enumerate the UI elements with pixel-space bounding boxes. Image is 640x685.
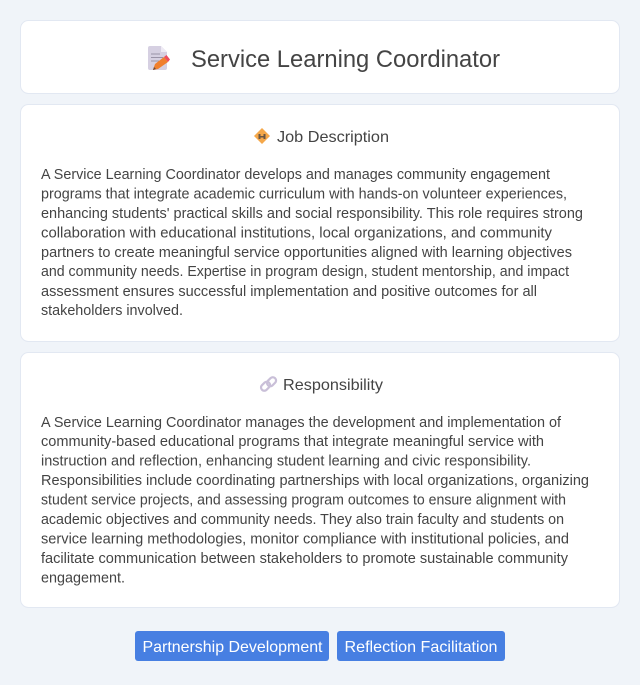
panel: responsibility — [20, 352, 620, 608]
panel: job description — [20, 104, 620, 342]
tag: reflection facilitation — [337, 631, 505, 661]
panel: title header — [20, 20, 620, 94]
text block: responsibility: A Service Learning Coordinator manages the development and implementation of — [41, 415, 562, 431]
text block: responsibility — [41, 415, 589, 586]
tag: partnership development — [135, 631, 329, 661]
text block: job description: enhancing students' practical skills and social responsibility. This role requires strong — [41, 206, 583, 222]
text block: responsibility: engagement. — [41, 570, 125, 586]
title: Service Learning Coordinator — [191, 46, 500, 73]
text block: job description: assessment ensures successful implementation and positive outcomes for all — [41, 284, 537, 300]
text block: job description: programs that integrate academic curriculum with hands-on volunteer experiences, — [41, 186, 567, 202]
text block: responsibility: facilitate communication between stakeholders to promote sustainable community — [41, 551, 569, 567]
text block: responsibility: service learning methodologies, monitor compliance with institutional policies, and — [41, 532, 569, 548]
icon: chain link — [260, 376, 277, 392]
text block: job description: partners to create meaningful service opportunities aligned with learning objectives — [41, 245, 572, 261]
tag: partnership development: Partnership Development — [142, 639, 323, 656]
text block: responsibility: instruction and reflection, enhancing student learning and civic responsibility. — [41, 454, 531, 470]
icon: children crossing diamond sign — [254, 128, 270, 144]
text block: responsibility: Responsibilities include coordinating partnerships with local organizations, organizing — [41, 473, 589, 489]
text block: job description: stakeholders involved. — [41, 303, 183, 319]
heading: responsibility: Responsibility — [283, 377, 383, 394]
icon: document with pencil — [148, 46, 170, 70]
text block: job description: A Service Learning Coordinator develops and manages community engagement — [41, 167, 550, 183]
text block: job description: collaboration with educational institutions, local organizations, and community — [41, 226, 553, 242]
text block: responsibility: community-based educational programs that integrate meaningful service with — [41, 434, 544, 450]
text block: responsibility: student service projects, and assessing program outcomes to ensure alignment with — [41, 492, 566, 508]
text block: job description: and community needs. Expertise in program design, student mentorship, and impact — [41, 264, 569, 280]
text block: job description — [41, 167, 583, 319]
tag: reflection facilitation: Reflection Facilitation — [344, 639, 498, 656]
text block: responsibility: academic objectives and community needs. They also train faculty and students on — [41, 512, 564, 528]
heading: job description: Job Description — [277, 129, 389, 146]
